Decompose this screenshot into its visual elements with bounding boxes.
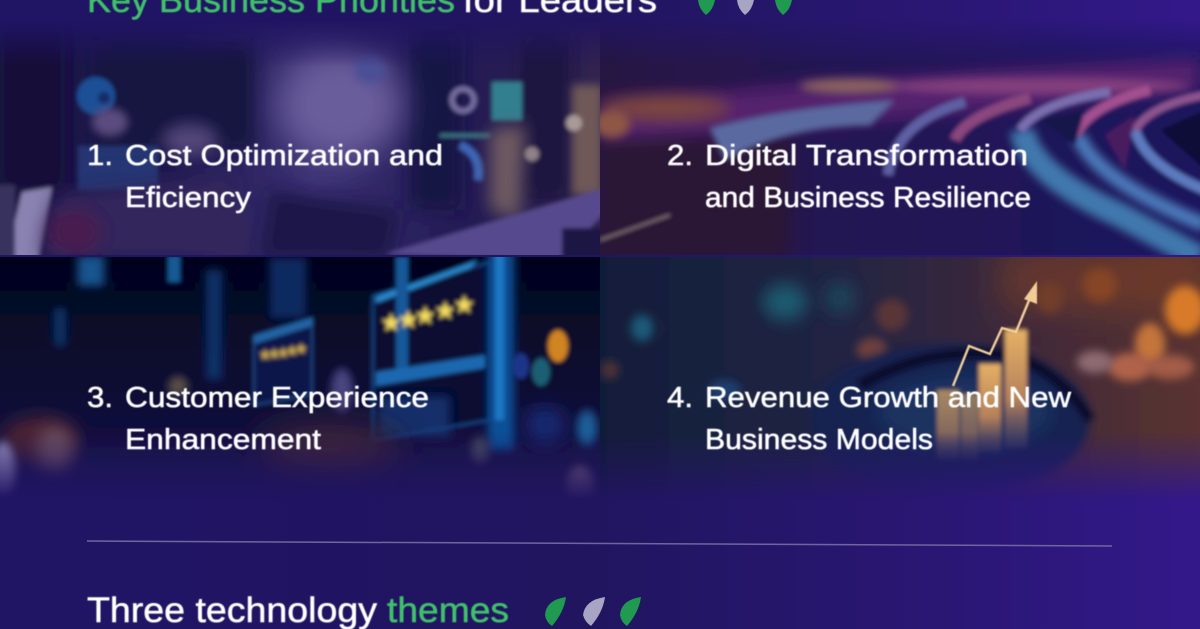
heading: three technology themes: Three technology — [87, 591, 378, 629]
review sign large — [373, 262, 490, 440]
tablet — [385, 188, 605, 260]
card text 1 — [87, 140, 443, 214]
stars: ★ — [397, 305, 419, 334]
card text 4: Revenue Growth and New — [705, 382, 1072, 414]
stars: ★ — [380, 308, 402, 337]
panel 2: digital transformation image — [600, 28, 1200, 255]
panel 3: customer experience image: ★ — [294, 339, 308, 358]
card text 3: Customer Experience — [125, 382, 429, 414]
shirt cuff — [6, 187, 52, 260]
panel 4: revenue growth image — [600, 257, 1200, 494]
dark dish — [810, 344, 1090, 496]
stars — [380, 290, 475, 337]
card text 2: and Business Resilience — [705, 182, 1031, 214]
card text 2: Digital Transformation — [705, 140, 1028, 172]
heading: three technology themes: themes — [387, 591, 509, 629]
stars: ★ — [453, 290, 475, 319]
panel 3: customer experience image — [0, 257, 600, 494]
card text 1: 1. — [87, 140, 113, 172]
card text 2: 2. — [667, 140, 693, 172]
card text 3: 3. — [87, 382, 113, 414]
card text 2 — [667, 140, 1031, 214]
card text 3: Enhancement — [125, 424, 321, 456]
chart bars and arrow — [937, 330, 1027, 460]
review sign small — [254, 318, 312, 405]
icon: bottom leaf marks — [545, 597, 641, 626]
card text 4 — [667, 382, 1072, 456]
card text 4: 4. — [667, 382, 693, 414]
title: key business priorities — [87, 0, 657, 20]
stars: ★ — [434, 296, 456, 325]
card text 1: Cost Optimization and — [125, 140, 443, 172]
card text 1: Eficiency — [125, 182, 252, 214]
panel 1: cost optimization image — [0, 29, 600, 255]
bokeh — [763, 284, 807, 320]
card text 3 — [87, 382, 429, 456]
panel 3: customer experience image: ★ — [258, 345, 272, 364]
panel 3: customer experience image: ★ — [267, 344, 281, 363]
panel 3: customer experience image: ★ — [276, 343, 290, 362]
icon: top leaf marks — [698, 0, 792, 15]
bokeh — [548, 330, 568, 362]
panel 3: customer experience image: ★ — [285, 341, 299, 360]
card text 4: Business Models — [705, 424, 933, 456]
growth arrow — [953, 281, 1037, 386]
stars: ★ — [414, 301, 436, 330]
heading: three technology themes — [87, 591, 509, 629]
